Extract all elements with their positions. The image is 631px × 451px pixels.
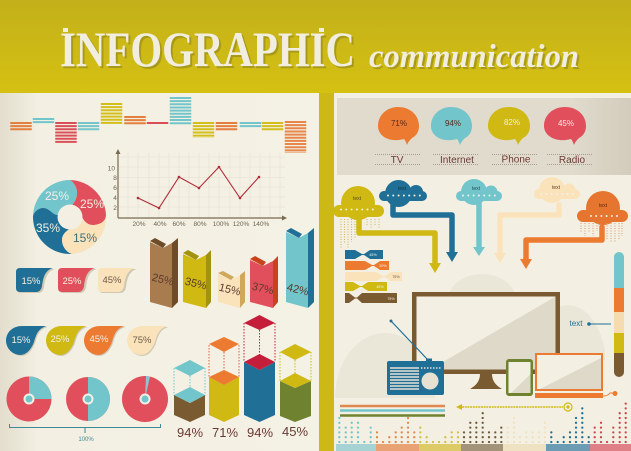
line chart: 140%	[253, 221, 270, 228]
isometric columns: 94%	[177, 425, 203, 440]
3D box chart: 37%	[251, 281, 275, 298]
striped bar chart	[21, 97, 296, 153]
line chart: 40%	[153, 221, 167, 228]
3D box chart: 25%	[151, 272, 175, 289]
cloud: navy: text	[398, 186, 407, 192]
isometric columns	[174, 315, 311, 440]
bubble: TV: 71%	[391, 119, 407, 128]
teardrop labels: 75%	[132, 335, 152, 346]
cloud: cream: text	[552, 185, 561, 191]
arrowheads	[429, 247, 532, 273]
callout: text	[570, 319, 611, 328]
line chart: 6	[113, 185, 117, 192]
3D box chart: 42%	[286, 282, 310, 299]
donut chart: 25%	[45, 189, 69, 203]
monitor	[412, 292, 560, 389]
bracket: 100%	[10, 424, 160, 443]
vertical capsule legend	[614, 252, 624, 377]
line chart: 10	[108, 166, 115, 172]
hourglass bars: 75%	[387, 297, 395, 301]
bubble labels: TV	[391, 155, 404, 166]
rounded tags	[16, 268, 137, 293]
bubble: Radio: 45%	[558, 119, 574, 128]
donut chart: 35%	[36, 221, 60, 235]
bubble labels: Internet	[440, 155, 474, 166]
cloud: cream	[534, 177, 580, 203]
subtitle: communication	[371, 41, 581, 77]
cloud: navy	[379, 180, 427, 207]
line chart: 8	[113, 175, 117, 182]
bubble: Radio	[544, 107, 586, 145]
bottom colour strip	[336, 444, 631, 451]
line chart: 120%	[233, 221, 250, 228]
3D box chart: 15%	[218, 282, 242, 299]
tablet	[506, 359, 533, 396]
title: INFOGRAPHIC	[60, 21, 355, 77]
bracket: 100%: 100%	[78, 437, 94, 443]
line chart: 20%	[132, 221, 146, 228]
horizontal bars	[340, 406, 445, 416]
rounded tags: 25%	[62, 276, 82, 287]
isometric columns: 71%	[212, 425, 238, 440]
teardrop labels: 15%	[11, 335, 31, 346]
cloud: yellow	[333, 186, 384, 248]
bubble: Internet	[431, 107, 472, 145]
title: INFOGRAPHIC	[62, 23, 357, 79]
bubble: Internet: 94%	[445, 119, 461, 128]
line chart	[108, 149, 287, 228]
squiggle arrow	[456, 403, 572, 411]
bubble labels: Phone	[502, 154, 531, 166]
laptop	[535, 353, 618, 398]
line chart: 80%	[193, 221, 207, 228]
dot equalizer	[339, 402, 626, 442]
cloud: orange	[577, 191, 628, 243]
pie charts	[6, 376, 168, 422]
hourglass bars: 45%	[376, 285, 384, 289]
teardrop labels: 45%	[89, 334, 109, 345]
arrows	[359, 203, 602, 264]
callout: text: text	[570, 319, 583, 328]
donut chart: 25%	[80, 197, 104, 211]
hourglass bars: 75%	[392, 275, 400, 279]
cloud: teal	[456, 179, 502, 205]
header band	[0, 0, 631, 93]
cloud: orange: text	[599, 203, 608, 209]
background domes	[335, 274, 605, 398]
cloud: teal: text	[472, 186, 481, 192]
rounded tags: 15%	[21, 276, 41, 287]
3D box chart: 35%	[184, 276, 208, 293]
bubble: Phone	[488, 107, 530, 145]
isometric columns: 94%	[247, 425, 273, 440]
line chart: 60%	[172, 221, 186, 228]
hourglass bars: 45%	[369, 253, 377, 257]
bubble labels: Radio	[559, 155, 585, 166]
donut chart	[33, 180, 106, 254]
bubble: Phone: 82%	[504, 118, 520, 127]
panel: speech bubbles	[337, 98, 631, 175]
radio	[387, 320, 444, 395]
bubble: TV	[378, 107, 419, 145]
3D box chart	[150, 228, 314, 308]
line chart: 4	[113, 195, 117, 202]
isometric columns: 45%	[282, 424, 308, 439]
bubble labels	[375, 154, 592, 166]
panel: left	[0, 93, 319, 451]
line chart: 100%	[213, 221, 230, 228]
cloud: yellow: text	[353, 196, 362, 202]
teardrop labels: 25%	[50, 334, 70, 345]
hourglass bars: 20%	[379, 264, 387, 268]
line chart: 2	[113, 205, 117, 212]
hourglass bars	[345, 250, 402, 303]
subtitle: communication	[369, 39, 579, 75]
rounded tags: 45%	[102, 275, 122, 286]
panel: right	[334, 93, 631, 451]
donut chart: 15%	[73, 231, 97, 245]
teardrop labels	[6, 326, 169, 356]
